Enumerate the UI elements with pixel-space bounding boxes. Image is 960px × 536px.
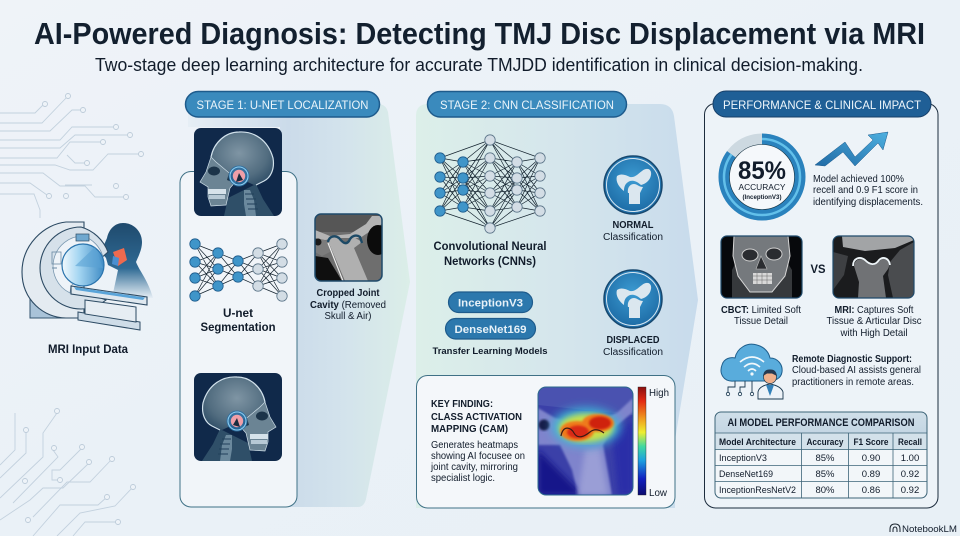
label: VS: VS: [810, 262, 826, 276]
label: MRI caption: Tissue & Articular Disc: [826, 315, 922, 327]
table rows: 85%: [815, 469, 835, 480]
table rows: 80%: [815, 485, 835, 496]
heading: key finding: MAPPING (CAM): [431, 423, 508, 435]
icon: cloud and doctor: [721, 344, 783, 399]
stage 1 header: [186, 92, 380, 117]
stage 1 header: STAGE 1: U-NET LOCALIZATION: [196, 100, 368, 112]
label: U-net segmentation: [200, 306, 276, 334]
label: CBCT caption: CBCT: Limited Soft: [721, 304, 801, 316]
panel header: PERFORMANCE & CLINICAL IMPACT: [723, 100, 921, 112]
image: CBCT scan: [721, 236, 802, 298]
panel: key finding CAM: [416, 376, 675, 508]
panel: stage 1 chevron background: [188, 104, 410, 507]
text: key finding body: [430, 440, 525, 484]
text: key finding body: joint cavity, mirroring: [430, 462, 518, 473]
text: key finding body: specialist logic.: [431, 473, 495, 484]
panel header: [713, 91, 931, 117]
table rows: 0.89: [862, 469, 880, 480]
logo: NotebookLM: NotebookLM: [902, 524, 957, 535]
icon: upward trend arrow: [815, 132, 888, 166]
table rows: [719, 453, 919, 496]
panel: performance and clinical impact: [704, 104, 938, 508]
table rows: 0.92: [901, 485, 919, 496]
label: low: Low: [649, 488, 668, 499]
table rows: 1.00: [901, 453, 919, 464]
label: normal classification: Classification: [603, 232, 663, 243]
icon: normal joint: [604, 156, 662, 214]
panel: stage 2 chevron background: [416, 104, 698, 508]
label: U-net segmentation: Segmentation: [200, 320, 276, 334]
table header row: Model Architecture: [719, 437, 796, 447]
image: cropped joint cavity: [314, 214, 389, 281]
label: CBCT caption: [721, 304, 801, 327]
label: convolutional neural networks: Networks (CNNs): [444, 254, 536, 268]
pill: InceptionV3: InceptionV3: [458, 298, 523, 310]
table header row: Accuracy: [806, 437, 844, 447]
image: skull MRI facing left: [194, 128, 282, 216]
pill: InceptionV3: [448, 292, 532, 312]
label: displaced classification: Classification: [603, 347, 663, 358]
label: cropped joint cavity: Cropped Joint: [316, 288, 380, 299]
text: model achievement: identifying displacements.: [813, 196, 923, 208]
label: cropped joint cavity: Skull & Air): [324, 311, 372, 322]
table rows: InceptionV3: [719, 453, 767, 464]
label: cropped joint cavity: [310, 288, 386, 322]
gauge: 85% accuracy: (InceptionV3): [742, 194, 782, 201]
icon: MRI scanner with patient: [22, 222, 153, 330]
text: remote diagnostic support: Remote Diagnostic Support:: [792, 353, 912, 365]
label: high: High: [649, 388, 669, 399]
text: remote diagnostic support: Cloud-based AI assists general: [792, 364, 921, 376]
text: remote diagnostic support: practitioners in remote areas.: [792, 376, 914, 388]
label: CBCT caption: Tissue Detail: [734, 315, 788, 327]
table header row: Recall: [898, 437, 922, 447]
image: CAM heatmap: [538, 387, 633, 495]
label: MRI caption: with High Detail: [840, 327, 908, 339]
image: skull MRI facing right: [194, 373, 282, 461]
text: key finding body: showing AI focusee on: [431, 451, 525, 462]
table: AI model performance comparison: [715, 412, 927, 498]
pill: DenseNet169: DenseNet169: [454, 324, 526, 336]
diagram: U-net network: [190, 239, 287, 301]
table rows: 85%: [815, 453, 835, 464]
icon: displaced joint: [604, 270, 662, 328]
label: cropped joint cavity: Cavity (Removed: [310, 300, 386, 311]
heading: key finding: CLASS ACTIVATION: [431, 411, 522, 423]
panel: U-net box: [180, 172, 297, 507]
image: MRI scan of joint: [833, 236, 914, 298]
label: MRI caption: [826, 304, 922, 339]
gauge: 85% accuracy: 85%: [738, 157, 786, 185]
label: convolutional neural networks: Convolutional Neural: [434, 239, 546, 253]
table rows: 0.90: [862, 453, 880, 464]
label: convolutional neural networks: [434, 239, 546, 268]
text: model achievement: Model achieved 100%: [813, 173, 904, 185]
label: normal classification: NORMAL: [612, 220, 654, 231]
gauge: 85% accuracy: ACCURACY: [738, 182, 786, 192]
text: remote diagnostic support: [792, 353, 921, 388]
table rows: DenseNet169: [719, 469, 773, 480]
text: model achievement: recell and 0.9 F1 score in: [813, 184, 918, 196]
text: model achievement: [813, 173, 923, 208]
label: U-net segmentation: U-net: [223, 306, 253, 320]
text: key finding body: Generates heatmaps: [431, 440, 518, 451]
heading: key finding: KEY FINDING:: [431, 398, 493, 410]
label: transfer learning models: Transfer Learning Models: [432, 346, 548, 357]
label: displaced classification: [603, 335, 663, 358]
table rows: 0.86: [862, 485, 880, 496]
table rows: 0.92: [901, 469, 919, 480]
table header row: [719, 437, 922, 447]
label: MRI input data: MRI Input Data: [48, 344, 129, 356]
stage 2 header: [428, 92, 626, 117]
table rows: InceptionResNetV2: [719, 485, 796, 496]
table header row: F1 Score: [854, 437, 888, 447]
diagram: CNN network: [435, 135, 545, 233]
heading: key finding: [431, 398, 522, 435]
table title: AI MODEL PERFORMANCE COMPARISON: [728, 417, 915, 429]
chart legend: colour scale: [638, 387, 646, 495]
label: normal classification: [603, 220, 663, 243]
gauge: 85% accuracy: [724, 139, 800, 215]
stage 2 header: STAGE 2: CNN CLASSIFICATION: [440, 100, 614, 112]
pill: DenseNet169: [446, 318, 536, 339]
label: displaced classification: DISPLACED: [606, 335, 660, 346]
subtitle: Two-stage deep learning architecture for accurate TMJDD identification in clinical decision-making.: [95, 54, 863, 75]
label: MRI caption: MRI: Captures Soft: [834, 304, 914, 316]
